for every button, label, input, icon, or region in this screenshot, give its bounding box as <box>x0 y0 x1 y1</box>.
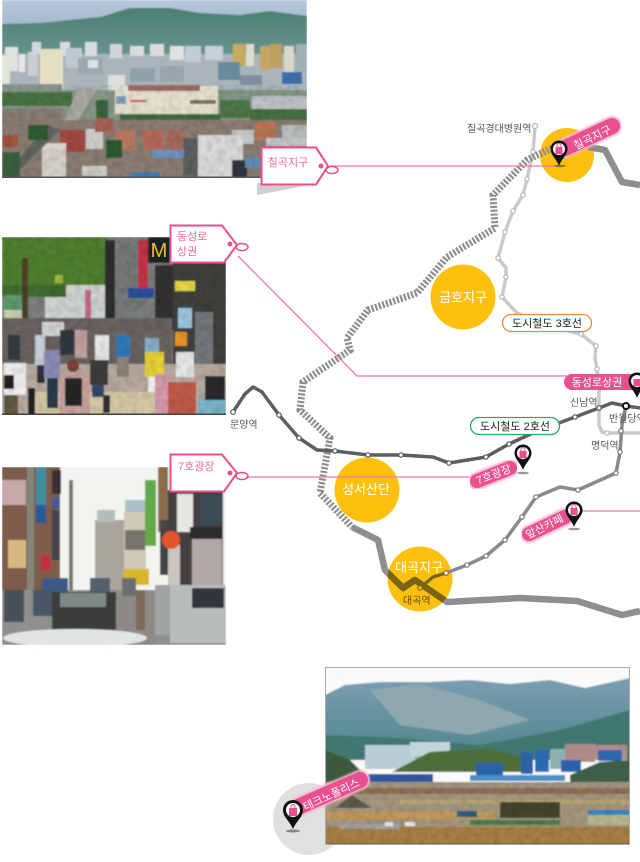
photo: No. 7 plaza street <box>2 467 226 647</box>
district circle: Daegok <box>388 546 452 612</box>
line label: metro line 2: 도시철도 2호선 <box>480 420 550 433</box>
connector: Dongseong-ro <box>238 256 575 376</box>
marker: Dongseong-ro shopping <box>572 372 640 398</box>
marker: Chilgok <box>550 123 614 167</box>
connector: No. 7 plaza <box>246 476 475 478</box>
station labels: 신남역 <box>570 397 598 409</box>
connector: Apsan cafe <box>582 510 640 512</box>
marker: No. 7 plaza <box>474 444 532 487</box>
tag: Dongseong-ro: 상권 <box>177 245 197 258</box>
marker: Apsan cafe <box>523 502 582 542</box>
district circle: Chilgok <box>540 128 594 182</box>
district circle: Seongseo industrial complex <box>334 458 400 522</box>
interchange: Banwoldang <box>623 403 629 409</box>
marker: Techno Polis <box>283 776 362 832</box>
connector: Chilgok <box>330 165 558 167</box>
district circle: Daegok: 대곡지구 <box>395 560 443 575</box>
tag: No. 7 plaza: 7호광장 <box>178 460 214 473</box>
overlap of rail line inside Daegok circle <box>388 570 449 603</box>
tag: Dongseong-ro: 동성로 <box>177 230 207 243</box>
marker: No. 7 plaza: 7호광장 <box>474 462 513 487</box>
gray circle behind Techno Polis pin <box>273 783 345 855</box>
photo: Chilgok district aerial view <box>2 0 307 178</box>
marker: Dongseong-ro shopping: 동성로상권 <box>572 376 622 389</box>
metro line 2 <box>231 387 640 465</box>
district circle: Seongseo industrial complex: 성서산단 <box>342 482 390 497</box>
line label: metro line 2 <box>470 418 560 434</box>
station labels: 칠곡경대병원역 <box>467 122 531 135</box>
tag shadow <box>257 183 320 195</box>
metro line 3 <box>496 124 640 435</box>
rail line: thick northeast <box>588 147 640 185</box>
marker: Techno Polis: 테크노폴리스 <box>301 776 362 814</box>
station labels: 명덕역 <box>591 440 619 452</box>
rail line: solid thick west <box>352 527 640 615</box>
line label: metro line 3: 도시철도 3호선 <box>512 317 582 330</box>
tag: No. 7 plaza <box>170 454 248 492</box>
tag: Chilgok <box>262 148 338 184</box>
photo: Dongseong-ro shopping street <box>2 237 226 415</box>
marker: Apsan cafe: 앞산카페 <box>523 512 566 542</box>
line label: metro line 3 <box>502 314 592 332</box>
tag: Dongseong-ro <box>170 226 248 262</box>
rail line: dashed national railway <box>300 148 552 527</box>
station labels: 문양역 <box>230 419 258 431</box>
station labels <box>230 122 640 607</box>
district circle: Geumho <box>430 264 496 330</box>
photo: Techno Polis site <box>325 667 630 845</box>
station labels: 대곡역 <box>403 595 431 607</box>
district circle: Geumho: 금호지구 <box>439 290 487 305</box>
tag: Chilgok: 칠곡지구 <box>268 156 308 169</box>
sign: golden arches: M <box>151 240 167 262</box>
metro line 1 <box>418 406 626 590</box>
marker: Chilgok: 칠곡지구 <box>571 123 614 153</box>
